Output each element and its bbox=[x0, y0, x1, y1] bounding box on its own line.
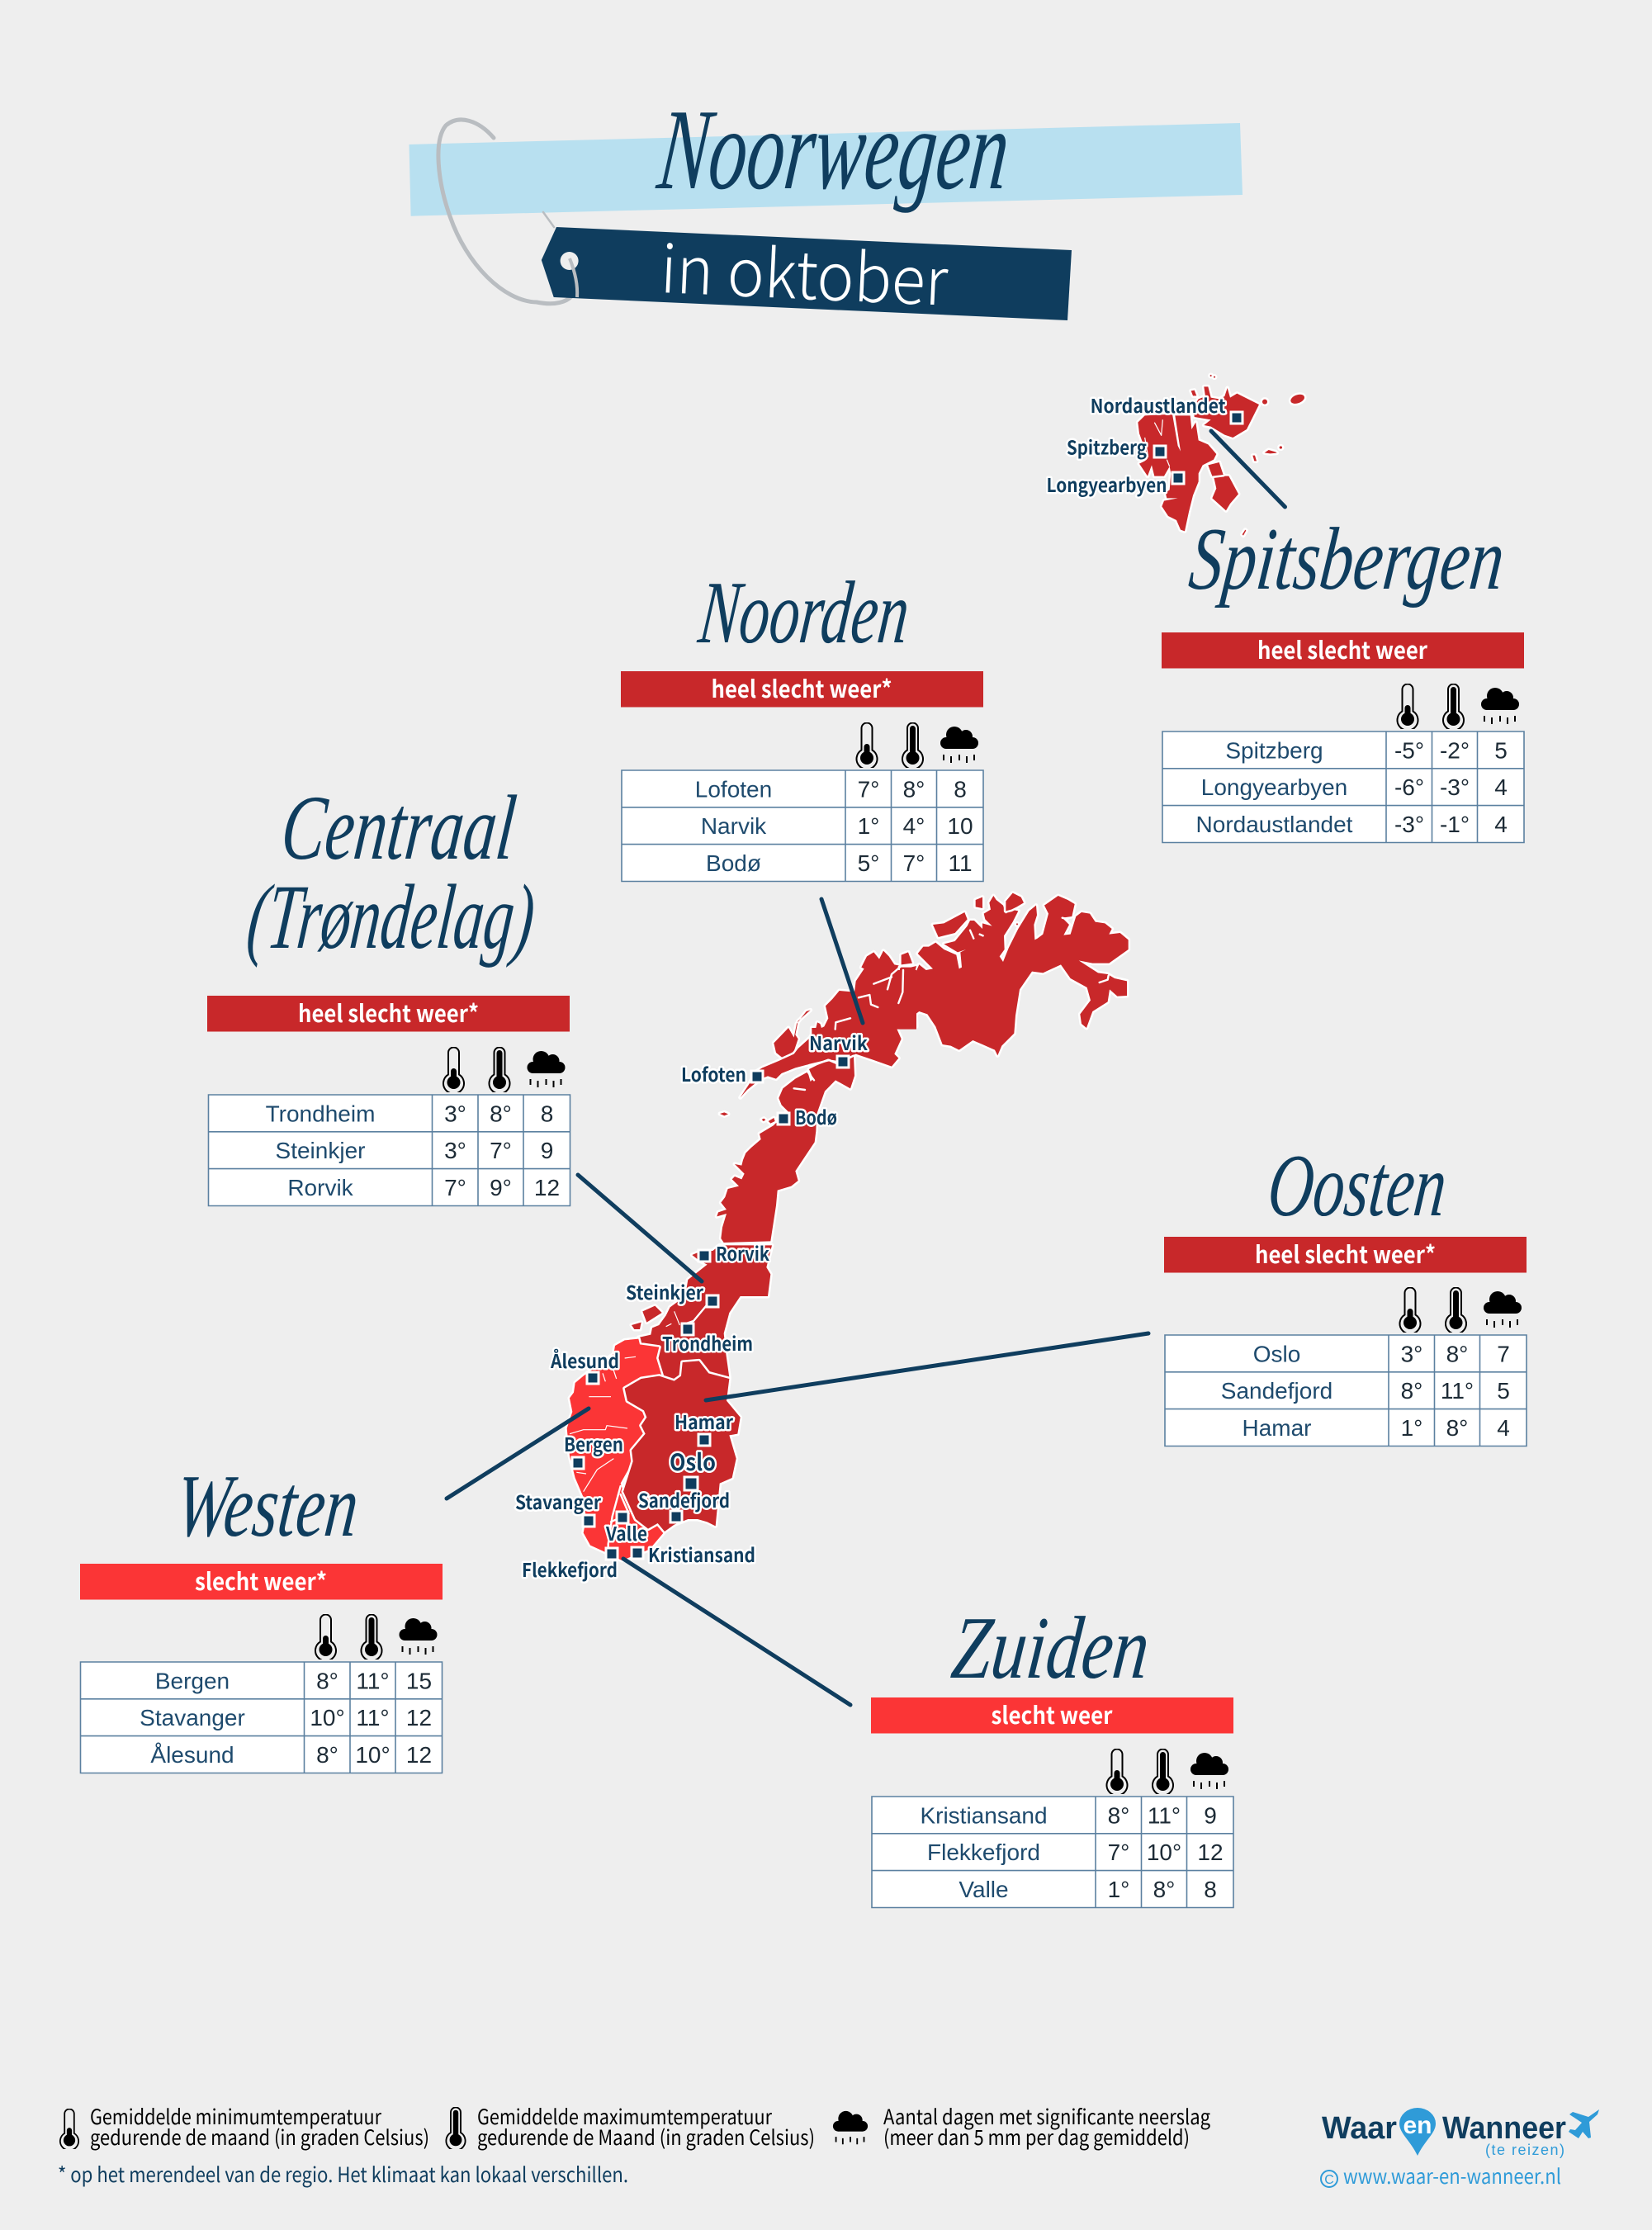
city: Rorvik: Rorvik bbox=[716, 1238, 769, 1267]
table: Oslo bbox=[1253, 1341, 1300, 1367]
weather banner: heel slecht weer* bbox=[712, 670, 892, 705]
weather banner bbox=[80, 1563, 443, 1600]
table: 9° bbox=[490, 1175, 512, 1200]
table: Narvik bbox=[701, 813, 767, 839]
legend: maximum temperature bbox=[446, 2101, 815, 2152]
weather banner bbox=[1162, 632, 1524, 669]
table: Sandefjord bbox=[1221, 1378, 1332, 1404]
table: 7° bbox=[490, 1138, 512, 1163]
seam patch bbox=[896, 970, 916, 1030]
legend: maximum temperature: gedurende de Maand (in graden Celsius) bbox=[477, 2122, 815, 2152]
table: 15 bbox=[406, 1668, 432, 1694]
city: Stavanger: Stavanger bbox=[515, 1487, 602, 1515]
weather banner bbox=[207, 995, 570, 1032]
city: Narvik: Narvik bbox=[809, 1028, 868, 1056]
table: 3° bbox=[1401, 1341, 1422, 1367]
table bbox=[81, 1662, 443, 1773]
pointer line: Centraal bbox=[578, 1175, 702, 1281]
weather banner: heel slecht weer bbox=[1257, 632, 1427, 666]
website link: C bbox=[1324, 2173, 1334, 2187]
city: Bergen bbox=[564, 1429, 623, 1469]
panel: Spitsbergen bbox=[1162, 510, 1524, 842]
weather banner bbox=[621, 670, 983, 707]
city: Oslo: Oslo bbox=[670, 1445, 716, 1478]
table: 9 bbox=[1204, 1803, 1217, 1828]
panel: Centraal (Trøndelag) bbox=[207, 777, 570, 1205]
table: 8° bbox=[1401, 1378, 1422, 1404]
table: 11° bbox=[1441, 1378, 1474, 1404]
table bbox=[1162, 731, 1524, 842]
region: Oosten bbox=[623, 1361, 741, 1532]
logo: Waar en Wanneer: (te reizen) bbox=[1485, 2142, 1564, 2158]
table: 8 bbox=[541, 1101, 553, 1126]
table: Rorvik bbox=[287, 1175, 354, 1200]
city: Rorvik bbox=[698, 1238, 769, 1267]
table: 8° bbox=[1153, 1877, 1175, 1902]
table: Spitzberg bbox=[1225, 738, 1323, 763]
table: 9 bbox=[541, 1138, 553, 1163]
table: 3° bbox=[444, 1101, 466, 1126]
city: Narvik bbox=[809, 1028, 868, 1068]
table: 12 bbox=[534, 1175, 560, 1200]
table: 1° bbox=[1108, 1877, 1129, 1902]
table: 1° bbox=[858, 813, 879, 839]
city: Nordaustlandet: Nordaustlandet bbox=[1091, 391, 1226, 419]
table: 7° bbox=[444, 1175, 466, 1200]
city: Oslo bbox=[670, 1445, 716, 1490]
table: 8° bbox=[490, 1101, 512, 1126]
heading: Centraal (Trøndelag): Centraal bbox=[277, 777, 520, 879]
legend: precipitation: Aantal dagen met significante neerslag bbox=[883, 2101, 1210, 2131]
table: Hamar bbox=[1242, 1415, 1312, 1441]
weather banner: heel slecht weer* bbox=[298, 995, 479, 1030]
pointer line: Spitsbergen bbox=[1211, 431, 1285, 507]
table: 12 bbox=[1197, 1839, 1224, 1865]
panel: Zuiden bbox=[871, 1599, 1233, 1907]
city: Sandefjord bbox=[638, 1485, 730, 1522]
region: Westen and Zuiden bbox=[567, 1339, 665, 1560]
city: Hamar bbox=[675, 1407, 734, 1446]
table: 10° bbox=[355, 1742, 391, 1768]
table: Lofoten bbox=[695, 776, 772, 803]
weather banner bbox=[1164, 1236, 1527, 1273]
table bbox=[1165, 1335, 1527, 1446]
table: Stavanger bbox=[140, 1705, 245, 1730]
panel: Noorden bbox=[621, 564, 983, 882]
heading: Noorden: Noorden bbox=[694, 564, 914, 662]
icon: map pin bbox=[1399, 2108, 1436, 2156]
table: Nordaustlandet bbox=[1196, 812, 1353, 837]
Spitsbergen landmass bbox=[1138, 375, 1306, 536]
column icons bbox=[443, 1047, 565, 1094]
pointer line: Zuiden bbox=[623, 1559, 850, 1705]
map: Spitsbergen bbox=[1047, 375, 1306, 536]
Finnmark and Troms bbox=[896, 893, 1129, 1055]
heading: Centraal (Trøndelag): (Trøndelag) bbox=[243, 866, 539, 968]
table: -6° bbox=[1394, 774, 1424, 800]
table: Flekkefjord bbox=[927, 1839, 1040, 1865]
heading: Zuiden: Zuiden bbox=[947, 1599, 1154, 1697]
legend: minimum temperature: Gemiddelde minimumtemperatuur bbox=[90, 2101, 381, 2131]
fjords of Troms bbox=[794, 966, 903, 1090]
table: 8° bbox=[1108, 1803, 1129, 1828]
column icons bbox=[1106, 1749, 1228, 1796]
legend bbox=[60, 2101, 1210, 2152]
title: Noorwegen: Noorwegen bbox=[651, 86, 1015, 214]
Nordland: Lofoten and Narvik area bbox=[717, 951, 916, 1243]
table: 11 bbox=[948, 850, 973, 876]
footnote: * op het merendeel van de regio. Het klimaat kan lokaal verschillen. bbox=[58, 2159, 628, 2189]
city: Trondheim: Trondheim bbox=[662, 1328, 753, 1356]
heading: Spitsbergen: Spitsbergen bbox=[1185, 510, 1509, 608]
pointer line: Westen bbox=[447, 1409, 589, 1499]
table: -2° bbox=[1440, 738, 1470, 763]
panel: Oosten bbox=[1164, 1137, 1527, 1446]
table: 1° bbox=[1401, 1415, 1422, 1441]
table: 12 bbox=[406, 1705, 432, 1730]
panel: Westen bbox=[80, 1457, 443, 1773]
table: 3° bbox=[444, 1138, 466, 1163]
table: Valle bbox=[959, 1877, 1009, 1902]
table: 10° bbox=[1147, 1839, 1181, 1865]
table bbox=[872, 1797, 1233, 1907]
northern Norway bbox=[717, 893, 1129, 1243]
title block bbox=[409, 86, 1243, 325]
city: Spitzberg: Spitzberg bbox=[1067, 433, 1147, 461]
logo: Waar en Wanneer: en bbox=[1403, 2112, 1432, 2139]
weather banner: heel slecht weer* bbox=[1255, 1236, 1436, 1271]
table: 7° bbox=[1108, 1839, 1129, 1865]
weather banner: slecht weer bbox=[991, 1697, 1113, 1731]
city: Steinkjer: Steinkjer bbox=[626, 1277, 704, 1305]
city: Bodø: Bodø bbox=[795, 1102, 837, 1130]
table: 7 bbox=[1497, 1341, 1510, 1367]
table: 8° bbox=[903, 776, 925, 803]
table: Steinkjer bbox=[276, 1138, 365, 1163]
city: Kristiansand: Kristiansand bbox=[648, 1540, 755, 1568]
website link: www.waar-en-wanneer.nl bbox=[1343, 2161, 1561, 2190]
logo: Waar en Wanneer: Waar bbox=[1322, 2111, 1397, 2146]
table: -5° bbox=[1394, 738, 1424, 763]
table: 8° bbox=[316, 1668, 338, 1694]
tag: in oktober bbox=[542, 216, 1072, 325]
table: Longyearbyen bbox=[1201, 774, 1347, 800]
table: 5 bbox=[1497, 1378, 1510, 1404]
city: Sandefjord: Sandefjord bbox=[638, 1485, 730, 1513]
table: -1° bbox=[1440, 812, 1470, 837]
heading: Westen: Westen bbox=[171, 1457, 363, 1555]
table: 11° bbox=[356, 1705, 390, 1730]
city: Bodø bbox=[778, 1102, 837, 1130]
table: Kristiansand bbox=[920, 1803, 1048, 1828]
table: 8° bbox=[1446, 1341, 1468, 1367]
table: 7° bbox=[858, 776, 879, 803]
table: 8° bbox=[316, 1742, 338, 1768]
legend: precipitation: (meer dan 5 mm per dag gemiddeld) bbox=[883, 2122, 1190, 2152]
region: Trøndelag bbox=[632, 1245, 772, 1380]
city: Lofoten: Lofoten bbox=[681, 1059, 746, 1087]
pointer line: Noorden bbox=[821, 899, 863, 1023]
table: 10° bbox=[310, 1705, 345, 1730]
legend: minimum temperature: gedurende de maand (in graden Celsius) bbox=[90, 2122, 429, 2152]
legend: maximum temperature: Gemiddelde maximumtemperatuur bbox=[477, 2101, 772, 2131]
city: Hamar: Hamar bbox=[675, 1407, 734, 1435]
table: 4 bbox=[1497, 1415, 1510, 1441]
heading: Oosten: Oosten bbox=[1263, 1137, 1451, 1235]
table: 8 bbox=[954, 776, 967, 803]
table: 4° bbox=[903, 813, 925, 839]
tag string bbox=[438, 120, 577, 304]
table: 5° bbox=[858, 850, 879, 876]
table: Trondheim bbox=[266, 1101, 375, 1126]
heading: Centraal (Trøndelag) bbox=[243, 777, 539, 968]
table: Bergen bbox=[155, 1668, 230, 1694]
logo: Waar en Wanneer bbox=[1322, 2108, 1599, 2158]
logo: Waar en Wanneer: Wanneer bbox=[1442, 2111, 1566, 2146]
weather banner: slecht weer* bbox=[195, 1563, 327, 1598]
legend: precipitation bbox=[833, 2101, 1210, 2152]
pointer line: Oosten bbox=[706, 1333, 1148, 1400]
city: Stavanger bbox=[515, 1487, 602, 1527]
city: Bergen: Bergen bbox=[564, 1429, 623, 1457]
city: Flekkefjord: Flekkefjord bbox=[522, 1555, 618, 1583]
table: 7° bbox=[903, 850, 925, 876]
table: 10 bbox=[947, 813, 973, 839]
table: 11° bbox=[1148, 1803, 1181, 1828]
table: 8° bbox=[1446, 1415, 1468, 1441]
table: 8 bbox=[1204, 1877, 1217, 1902]
table: -3° bbox=[1440, 774, 1470, 800]
column icons bbox=[1400, 1288, 1522, 1334]
table bbox=[208, 1095, 570, 1205]
central and southern regions bbox=[567, 1245, 772, 1560]
table: 12 bbox=[406, 1742, 432, 1768]
city: Ålesund bbox=[550, 1346, 619, 1384]
table: 11° bbox=[356, 1668, 390, 1694]
title band: light blue bbox=[409, 123, 1243, 216]
column icons bbox=[857, 723, 978, 769]
city: Longyearbyen: Longyearbyen bbox=[1047, 470, 1167, 498]
table: 5 bbox=[1494, 738, 1508, 763]
column icons bbox=[1397, 684, 1519, 731]
weather banner bbox=[871, 1697, 1233, 1734]
tag: in oktober: in oktober bbox=[659, 216, 950, 325]
table: 4 bbox=[1494, 812, 1508, 837]
table bbox=[622, 770, 983, 882]
city: Ålesund: Ålesund bbox=[550, 1346, 619, 1374]
map: mainland Norway bbox=[515, 893, 1129, 1583]
table: -3° bbox=[1394, 812, 1424, 837]
table: Ålesund bbox=[150, 1742, 234, 1768]
table: Bodø bbox=[706, 850, 761, 876]
legend: minimum temperature bbox=[60, 2101, 429, 2152]
city: Valle: Valle bbox=[605, 1518, 647, 1546]
table: 4 bbox=[1494, 774, 1508, 800]
icon: airplane bbox=[1569, 2109, 1599, 2138]
column icons bbox=[315, 1615, 438, 1661]
